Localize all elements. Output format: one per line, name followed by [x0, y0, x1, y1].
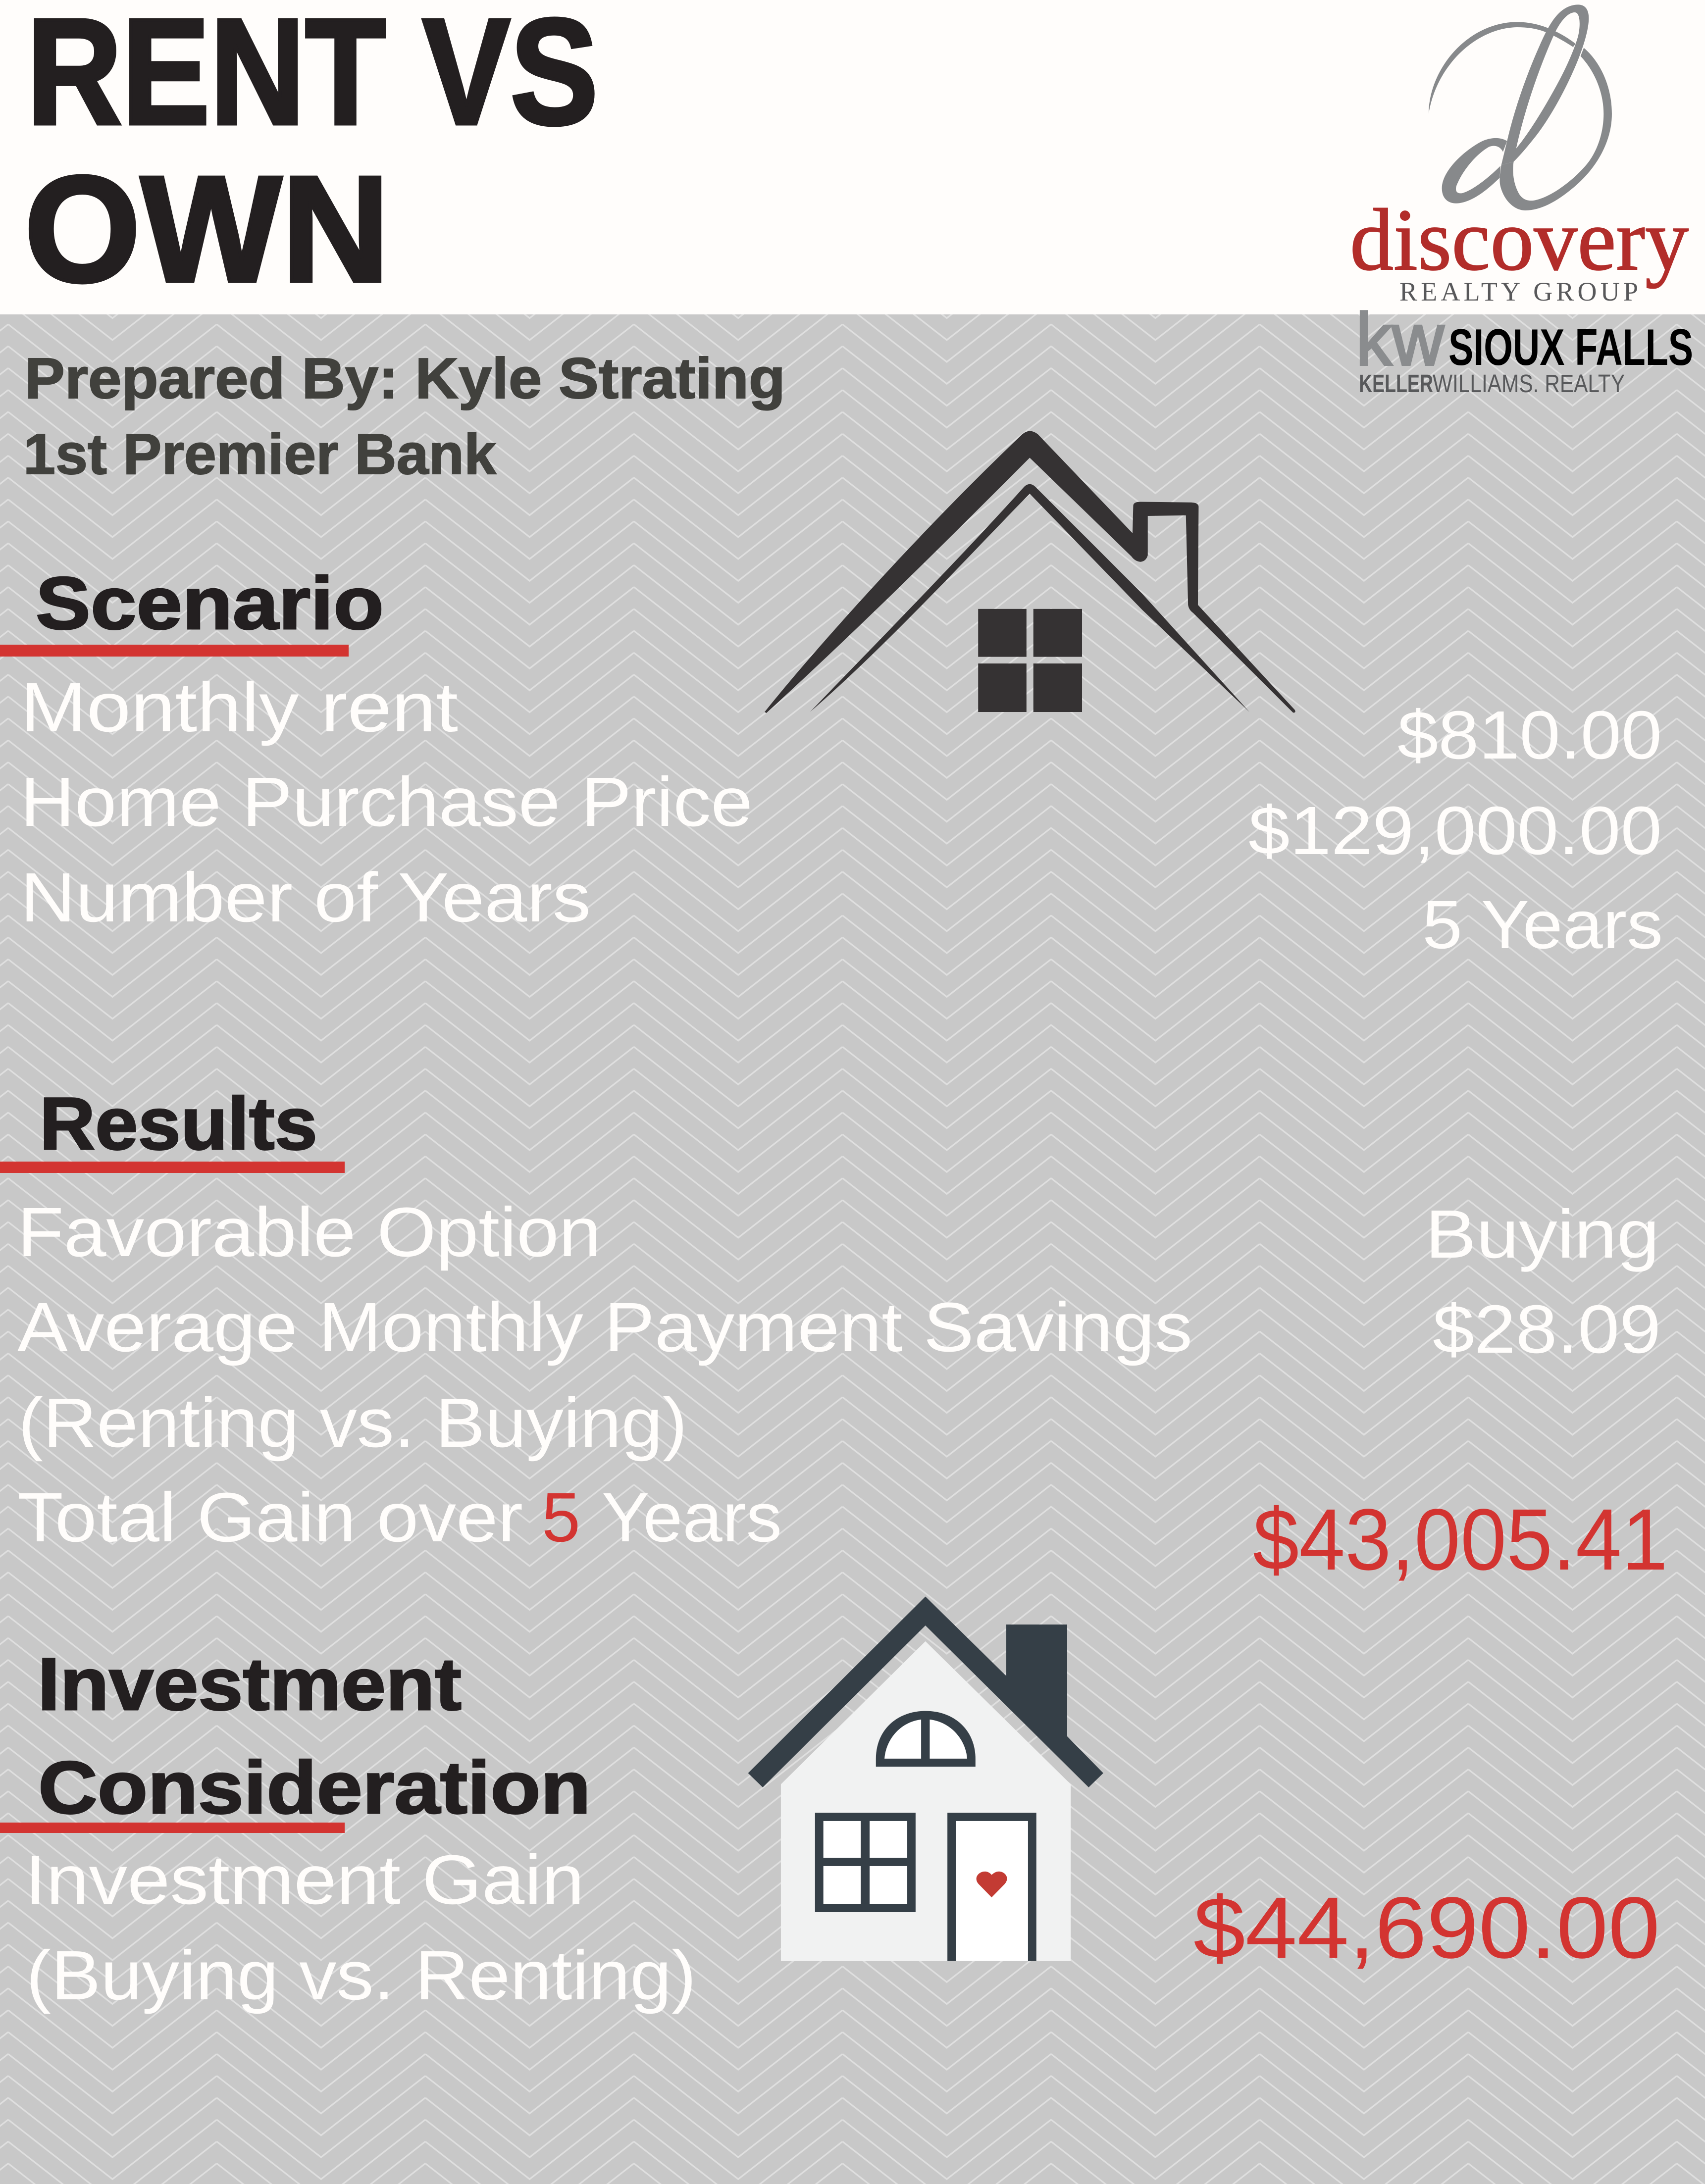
scenario labels: Monthly rent	[20, 668, 458, 746]
title	[24, 0, 598, 313]
header band	[0, 0, 1705, 314]
value: total gain: $43,005.41	[1253, 1491, 1668, 1588]
results labels: Favorable Option	[17, 1193, 601, 1271]
results labels: Average Monthly Payment Savings	[17, 1288, 1192, 1366]
icon: house roof outline	[765, 431, 1295, 713]
results labels	[17, 1193, 1192, 1556]
investment labels	[25, 1840, 696, 2014]
title: OWN	[24, 145, 390, 313]
results labels: 5	[542, 1478, 580, 1556]
logo: keller williams sioux falls	[1356, 298, 1693, 398]
results labels: Total Gain over	[17, 1478, 523, 1556]
scenario labels: Number of Years	[20, 858, 591, 936]
results values: $28.09	[1433, 1291, 1661, 1368]
heading: investment consideration: Investment	[38, 1642, 462, 1726]
logo: discovery realty group	[1350, 4, 1689, 306]
heading rule: results	[0, 1162, 345, 1173]
scenario labels: Home Purchase Price	[20, 762, 753, 841]
results labels: Years	[602, 1478, 782, 1556]
logo line: keller williams realty: WILLIAMS. REALTY	[1433, 369, 1625, 398]
logo tagline: realty group: REALTY GROUP	[1399, 277, 1638, 306]
results values	[1425, 1196, 1661, 1368]
heading: results: Results	[40, 1082, 317, 1165]
investment labels: (Buying vs. Renting)	[26, 1936, 696, 2014]
logo line: keller williams realty	[1359, 369, 1625, 398]
heading: investment consideration	[38, 1642, 591, 1829]
prepared by text	[23, 346, 785, 486]
value: investment gain: $44,690.00	[1193, 1879, 1660, 1977]
heading: scenario: Scenario	[36, 561, 384, 645]
logo mark: kw: kw	[1356, 298, 1445, 381]
heading rule: investment	[0, 1823, 345, 1833]
logo wordmark: discovery: discovery	[1350, 191, 1689, 289]
icon: script d monogram	[1429, 4, 1612, 210]
results labels: (Renting vs. Buying)	[18, 1383, 687, 1462]
prepared by text: Prepared By: Kyle Strating	[25, 346, 785, 410]
scenario values: 5 Years	[1422, 887, 1663, 963]
heading: investment consideration: Consideration	[38, 1746, 591, 1829]
scenario values	[1248, 697, 1663, 963]
investment labels: Investment Gain	[25, 1840, 584, 1919]
logo line: keller williams realty: KELLER	[1359, 369, 1433, 398]
icon: white house	[748, 1596, 1103, 1961]
prepared by text: 1st Premier Bank	[23, 422, 496, 486]
results values: Buying	[1425, 1196, 1659, 1272]
scenario values: $810.00	[1397, 697, 1662, 773]
scenario values: $129,000.00	[1248, 793, 1662, 869]
scenario labels	[20, 668, 753, 936]
heading rule: scenario	[0, 645, 349, 657]
